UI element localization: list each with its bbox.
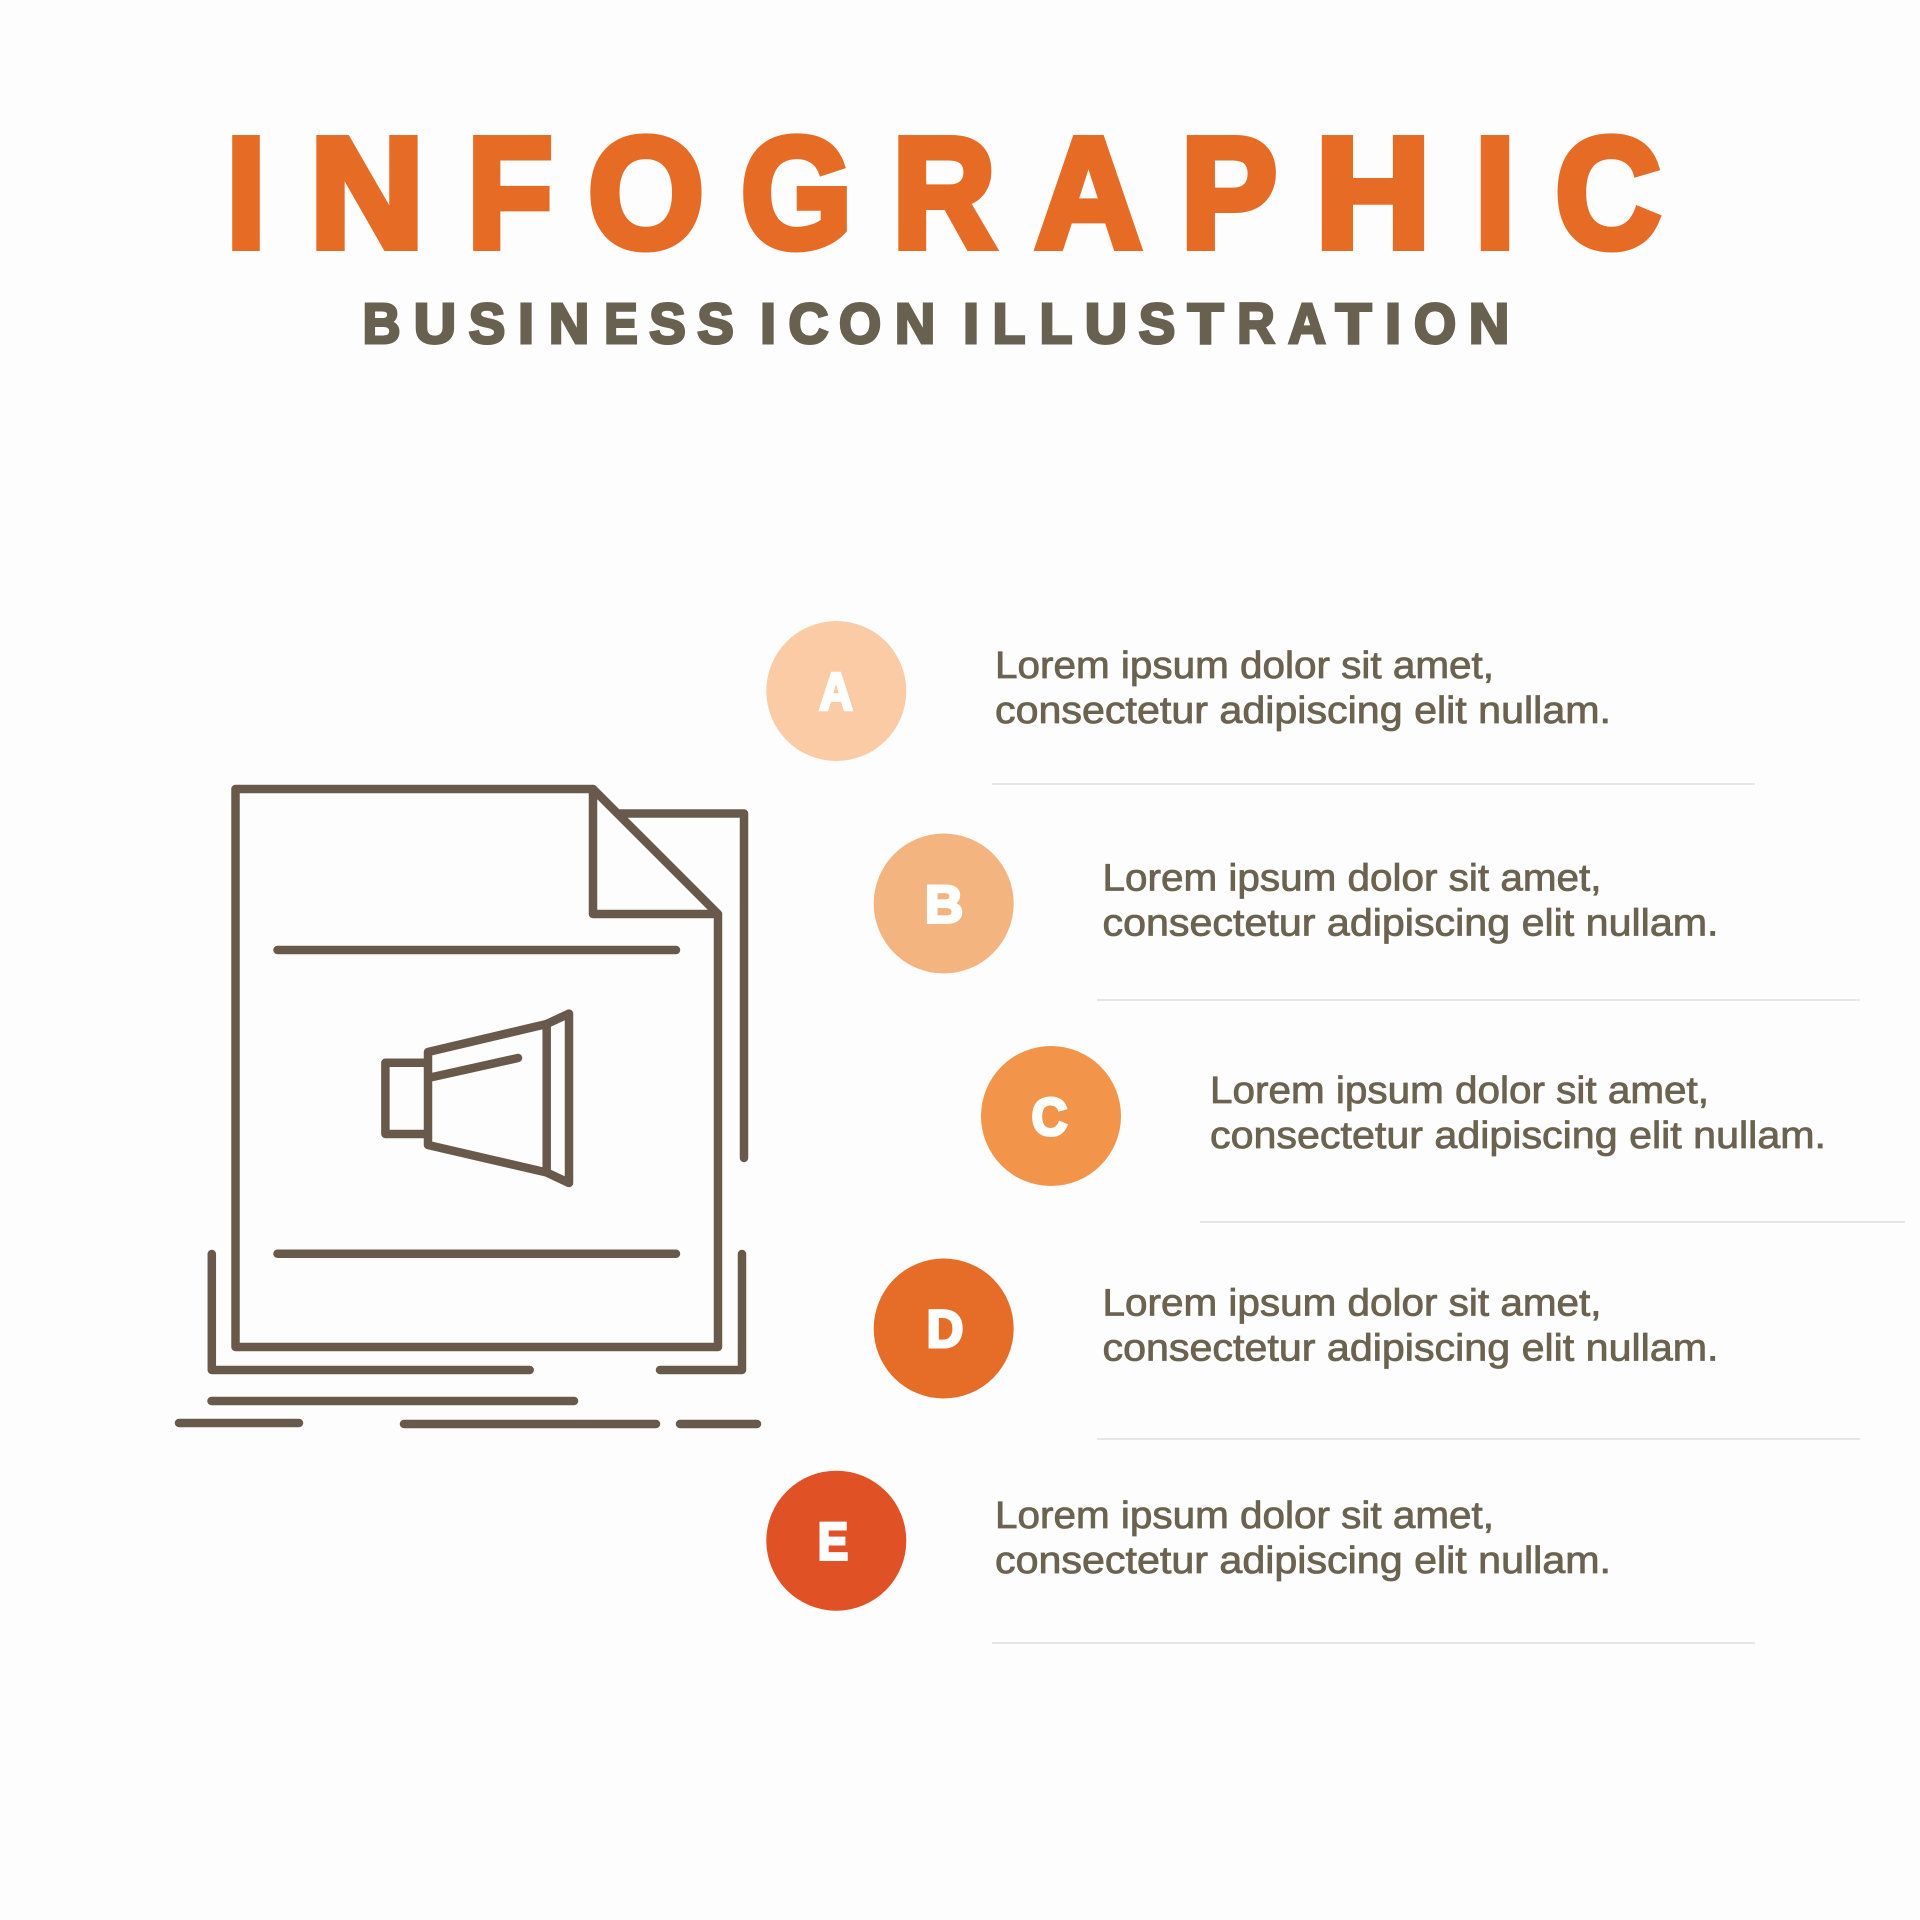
subtitle: S xyxy=(697,291,734,355)
item A xyxy=(766,621,1755,784)
subtitle xyxy=(363,291,1509,356)
title: F xyxy=(467,105,553,281)
subtitle: L xyxy=(1040,291,1072,355)
subtitle: O xyxy=(1414,292,1456,355)
title: O xyxy=(588,106,704,281)
circle D xyxy=(874,1258,1014,1398)
icon: audio document with megaphone xyxy=(179,789,757,1424)
subtitle: S xyxy=(649,291,686,355)
text E: consectetur adipiscing elit nullam. xyxy=(995,1540,1611,1582)
title: R xyxy=(892,105,996,280)
subtitle: B xyxy=(363,291,400,355)
subtitle: S xyxy=(469,291,505,355)
title xyxy=(226,104,1661,281)
icon: back page xyxy=(619,814,744,1158)
subtitle: I xyxy=(963,292,979,356)
circle A xyxy=(766,621,906,761)
item B xyxy=(874,834,1860,1000)
item D xyxy=(874,1258,1860,1439)
text B: Lorem ipsum dolor sit amet, xyxy=(1102,858,1602,900)
circle D: D xyxy=(927,1300,963,1359)
circle C xyxy=(981,1046,1121,1186)
title: C xyxy=(1555,106,1661,281)
title: I xyxy=(1475,106,1515,281)
circle E: E xyxy=(818,1512,848,1571)
title: H xyxy=(1315,104,1431,281)
circle B xyxy=(874,834,1014,974)
text C: consectetur adipiscing elit nullam. xyxy=(1210,1115,1826,1157)
title: N xyxy=(310,106,424,281)
text B xyxy=(1102,858,1718,944)
subtitle: N xyxy=(895,291,935,355)
subtitle: T xyxy=(1336,293,1371,356)
text E: Lorem ipsum dolor sit amet, xyxy=(995,1495,1494,1537)
icon: document text lines xyxy=(278,950,676,1254)
circle C: C xyxy=(1032,1087,1067,1146)
subtitle: I xyxy=(760,292,776,356)
subtitle: C xyxy=(789,291,828,355)
text D xyxy=(1102,1282,1718,1370)
icon: document sheet xyxy=(236,789,718,1347)
icon: ground lines xyxy=(179,1401,757,1424)
text A: consectetur adipiscing elit nullam. xyxy=(995,690,1611,732)
circle E xyxy=(766,1471,906,1611)
title: G xyxy=(741,105,852,280)
title: P xyxy=(1181,104,1277,280)
subtitle: E xyxy=(604,292,638,356)
subtitle: L xyxy=(993,291,1025,355)
subtitle: I xyxy=(518,292,534,356)
text C: Lorem ipsum dolor sit amet, xyxy=(1210,1070,1709,1112)
subtitle: N xyxy=(549,291,589,355)
text D: consectetur adipiscing elit nullam. xyxy=(1102,1328,1718,1370)
text B: consectetur adipiscing elit nullam. xyxy=(1102,902,1718,944)
text A xyxy=(995,645,1611,732)
subtitle: O xyxy=(839,292,881,355)
subtitle: A xyxy=(1288,292,1326,356)
subtitle: U xyxy=(414,293,456,356)
title: I xyxy=(226,105,266,281)
text A: Lorem ipsum dolor sit amet, xyxy=(995,645,1494,687)
subtitle: N xyxy=(1469,291,1509,355)
item C xyxy=(981,1046,1905,1222)
text D: Lorem ipsum dolor sit amet, xyxy=(1102,1282,1602,1324)
subtitle: U xyxy=(1085,293,1127,356)
text C xyxy=(1210,1070,1826,1157)
title: A xyxy=(1035,106,1142,281)
subtitle: S xyxy=(1139,291,1175,355)
icon: megaphone xyxy=(385,1014,569,1183)
subtitle: R xyxy=(1237,292,1275,356)
subtitle: T xyxy=(1188,293,1223,356)
item E xyxy=(766,1471,1755,1643)
circle B: B xyxy=(925,876,963,934)
text E xyxy=(995,1495,1611,1582)
subtitle: I xyxy=(1385,292,1401,356)
icon: base bracket xyxy=(212,1254,742,1370)
circle A: A xyxy=(819,662,853,722)
